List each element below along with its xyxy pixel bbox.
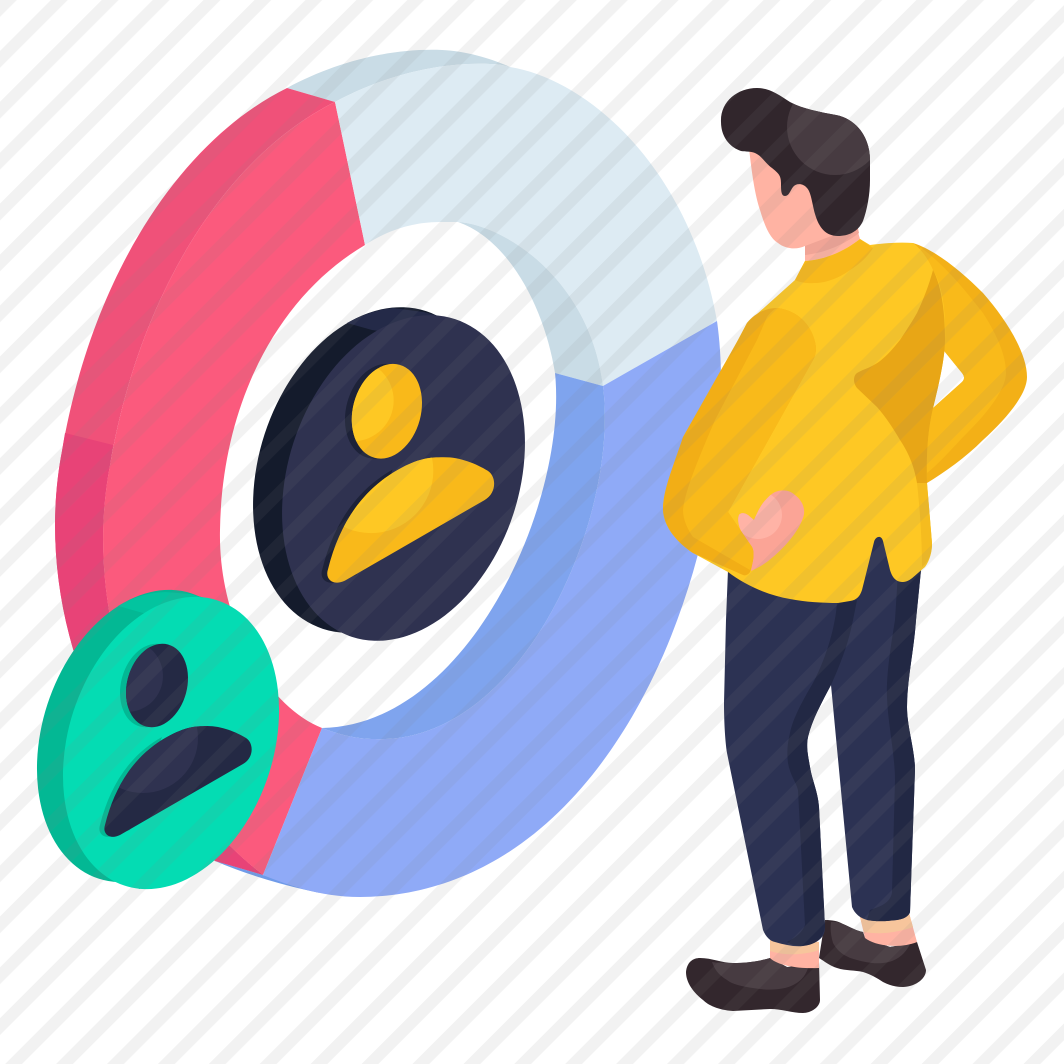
sweater [663, 239, 945, 603]
donut back rim: light blue [287, 50, 510, 102]
icon head [126, 644, 188, 728]
user icon: navy [99, 644, 252, 837]
donut inner wall: light blue [458, 222, 603, 386]
badge face [27, 569, 315, 917]
donut side: lower pink [55, 433, 263, 875]
left ankle [770, 938, 819, 968]
right shoe [819, 920, 926, 987]
trouser shade: right leg [867, 560, 922, 921]
icon shoulders [104, 726, 252, 837]
badge edge [1, 562, 289, 910]
neck [805, 222, 860, 261]
far arm [913, 243, 1027, 483]
sweater collar shade [795, 239, 873, 283]
donut side: blue sliver [215, 861, 320, 893]
icon head [352, 364, 422, 459]
donut inner wall: blue [322, 373, 605, 739]
left shoe [686, 958, 820, 1013]
green badge with user icon [36, 590, 280, 890]
donut segment: blue [263, 321, 721, 897]
sweater side shade [854, 270, 945, 483]
donut side: upper pink [55, 88, 335, 875]
near arm [663, 308, 816, 575]
right ankle [860, 913, 917, 946]
hair [720, 88, 870, 236]
sweater lower side shade [917, 483, 932, 567]
icon shoulders [327, 457, 494, 583]
donut chart [55, 50, 721, 897]
donut segment: pink [103, 102, 365, 875]
man standing, looking at the chart [663, 79, 1027, 1013]
badge edge highlight [347, 308, 453, 340]
trousers [724, 525, 922, 946]
hand on hip [734, 490, 804, 571]
user icon: gold [322, 364, 494, 583]
trouser shade: inner leg [787, 600, 857, 946]
badge edge highlight [118, 592, 216, 625]
icon shadow [322, 356, 425, 583]
badge edge [213, 275, 536, 665]
icon shadow [99, 637, 191, 837]
center badge with user icon [253, 307, 525, 641]
face [749, 148, 842, 248]
donut segment: light blue [335, 64, 717, 386]
badge face [242, 283, 565, 673]
